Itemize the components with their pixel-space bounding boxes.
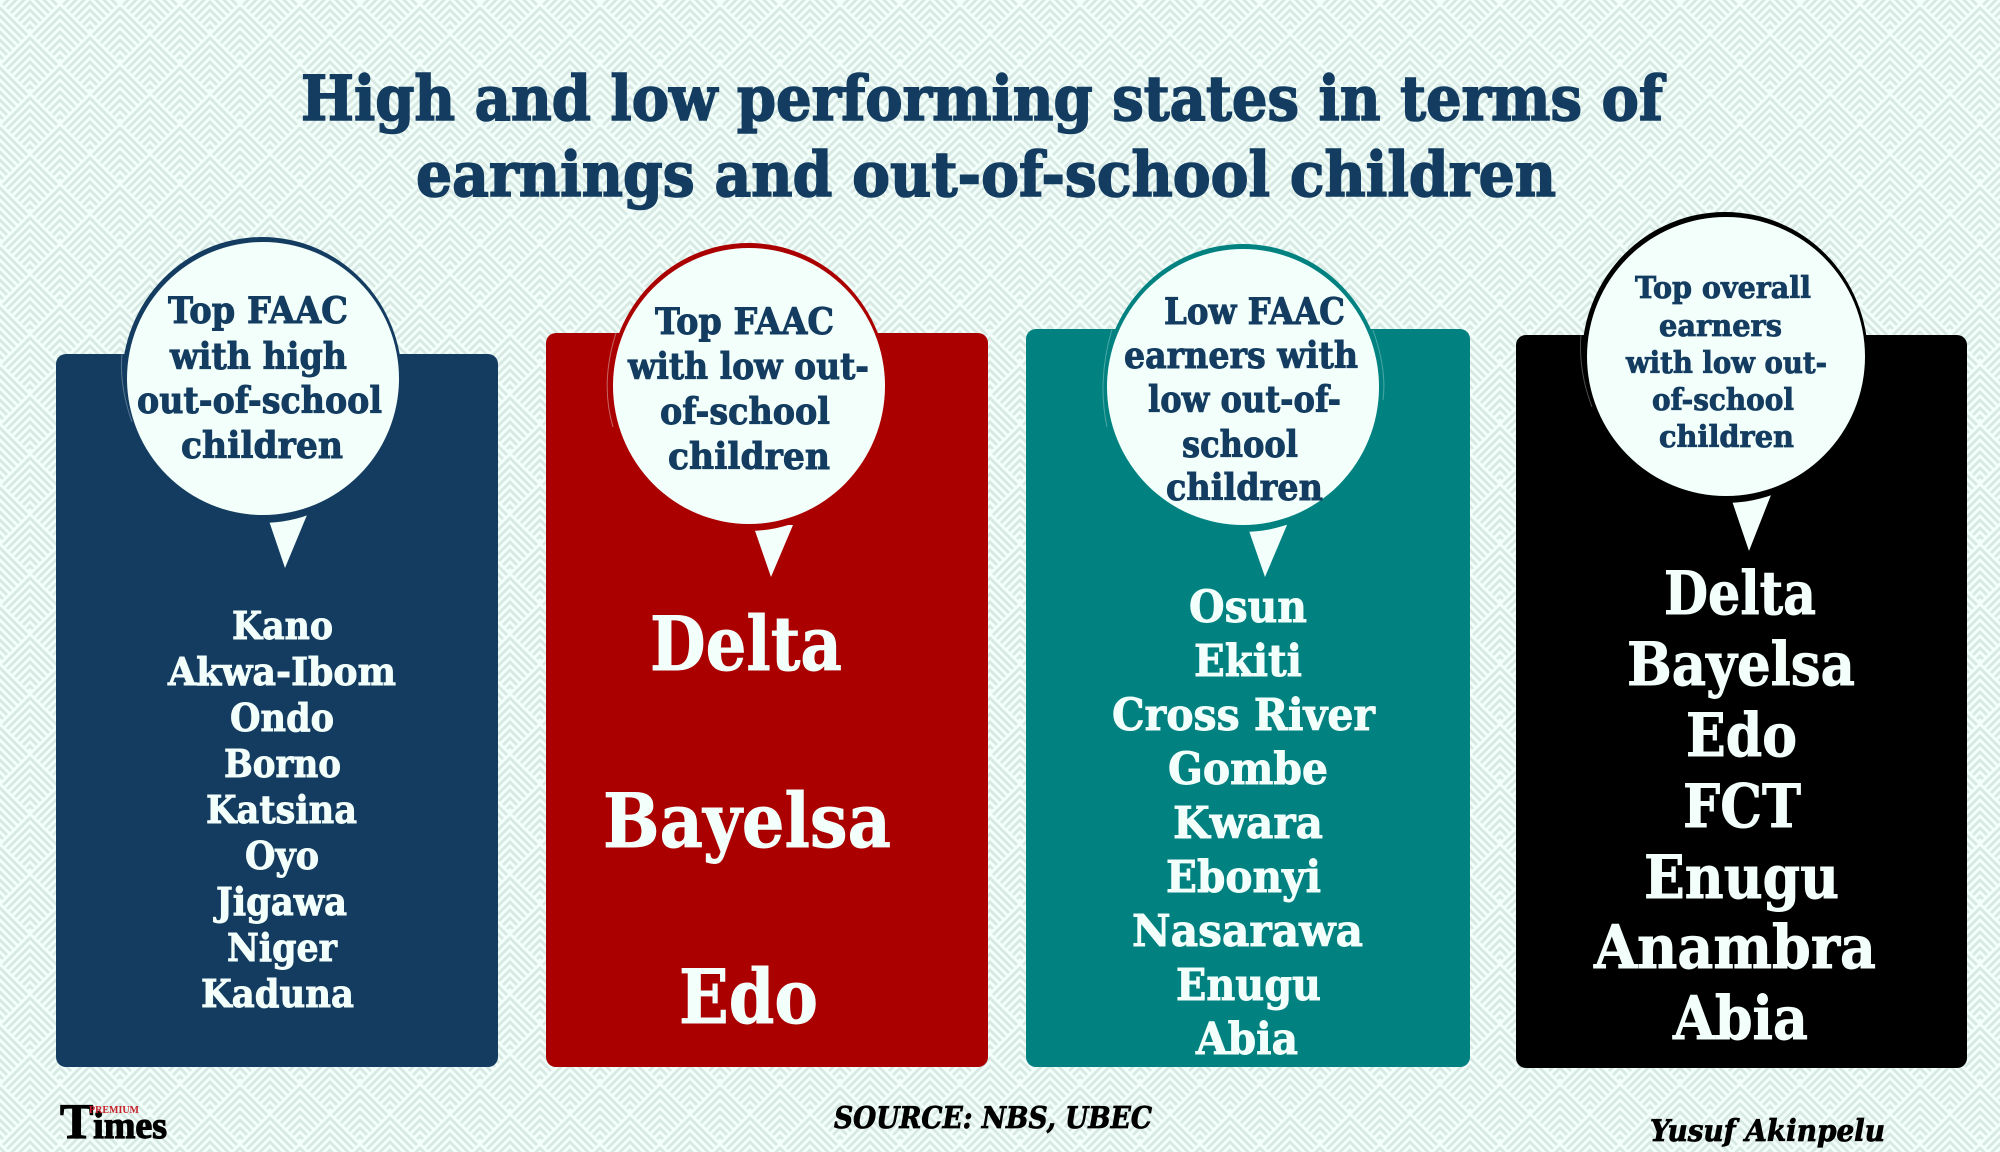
panel: top overall earners with low out-of-school children (1516, 212, 1967, 1068)
icon: speech bubble pointer, teal panel (1247, 525, 1287, 577)
bubble heading, black panel: with low out- (1625, 346, 1827, 381)
bubble ring, navy panel (122, 237, 402, 523)
icon: speech bubble pointer, navy panel (267, 515, 307, 568)
bubble heading, navy panel: children (181, 425, 343, 467)
bubble heading, black panel (1625, 271, 1827, 455)
bubble heading, teal panel: earners with (1124, 335, 1358, 377)
state list, red panel: Bayelsa (603, 777, 891, 865)
bubble fill, black panel (1587, 217, 1865, 496)
bubble heading, navy panel: with high (169, 336, 347, 378)
panel: top FAAC with high out-of-school children (56, 237, 498, 1067)
bubble heading, black panel: Top overall (1635, 271, 1811, 306)
bubble heading, teal panel (1124, 291, 1358, 509)
bubble heading, red panel: Top FAAC (655, 301, 834, 343)
bubble fill, teal panel (1107, 249, 1379, 525)
icon: speech bubble pointer, red panel (753, 525, 793, 577)
state list, navy panel: Jigawa (213, 879, 347, 924)
state list, navy panel: Borno (224, 741, 341, 786)
state list, navy panel: Katsina (206, 787, 357, 832)
bubble heading, red panel: children (668, 436, 830, 478)
panel: top FAAC with low out-of-school children (546, 243, 988, 1067)
bubble heading, teal panel: Low FAAC (1164, 291, 1345, 333)
bubble heading, teal panel: low out-of- (1148, 379, 1341, 421)
state list, black panel: FCT (1683, 772, 1801, 842)
bubble heading, teal panel: children (1166, 467, 1323, 509)
bubble heading, black panel: children (1659, 420, 1794, 455)
bubble heading, black panel: of-school (1652, 383, 1794, 418)
panel: low FAAC earners with low out-of-school children (1026, 244, 1470, 1067)
state list, navy panel: Akwa-Ibom (167, 649, 396, 694)
bubble ring, black panel (1582, 212, 1868, 503)
bubble fill, red panel (613, 248, 885, 524)
bubble heading, black panel: earners (1659, 309, 1782, 344)
state list, black panel: Delta (1664, 559, 1816, 629)
state list, navy panel: Ondo (230, 695, 334, 740)
icon: speech bubble pointer, black panel (1730, 495, 1771, 551)
bubble ring, red panel (609, 243, 888, 531)
state list, black panel: Anambra (1593, 913, 1876, 983)
state list, red panel: Edo (679, 953, 818, 1041)
state list, black panel (1593, 559, 1876, 1054)
bubble heading, navy panel: out-of-school (137, 380, 382, 422)
state list, navy panel: Niger (227, 925, 338, 970)
logo: Premium Times: PREMIUM (89, 1105, 140, 1116)
title: High and low performing states in terms of (301, 62, 1666, 135)
bubble heading, navy panel: Top FAAC (168, 290, 348, 332)
state list, navy panel: Kaduna (201, 971, 354, 1016)
title: earnings and out-of-school children (416, 138, 1556, 211)
state list, teal panel: Gombe (1168, 744, 1328, 795)
bubble heading, navy panel (137, 290, 382, 467)
bubble heading, red panel (627, 301, 869, 478)
state list, red panel (603, 600, 891, 1041)
state list, black panel: Abia (1672, 984, 1808, 1054)
bubble heading, red panel: with low out- (627, 346, 869, 388)
source note: SOURCE: NBS, UBEC (834, 1101, 1152, 1136)
state list, teal panel: Ebonyi (1166, 852, 1321, 903)
state list, teal panel: Cross River (1112, 690, 1376, 741)
state list, teal panel: Nasarawa (1132, 906, 1363, 957)
state list, red panel: Delta (650, 600, 842, 688)
bubble ring, teal panel (1103, 244, 1383, 532)
state list, navy panel: Oyo (245, 833, 319, 878)
state list, black panel: Enugu (1644, 843, 1839, 913)
state list, black panel: Bayelsa (1627, 630, 1855, 700)
state list, navy panel (167, 603, 396, 1016)
state list, teal panel: Abia (1195, 1014, 1298, 1065)
state list, teal panel (1112, 582, 1376, 1065)
bubble fill, navy panel (127, 242, 399, 515)
bubble heading, red panel: of-school (660, 391, 830, 433)
author credit: Yusuf Akinpelu (1650, 1114, 1885, 1149)
state list, black panel: Edo (1686, 701, 1797, 771)
state list, teal panel: Kwara (1173, 798, 1323, 849)
title (301, 62, 1666, 211)
logo: Premium Times: Times (60, 1093, 167, 1149)
state list, teal panel: Enugu (1176, 960, 1321, 1011)
state list, teal panel: Osun (1189, 582, 1307, 633)
state list, navy panel: Kano (232, 603, 333, 648)
state list, teal panel: Ekiti (1194, 636, 1302, 687)
bubble heading, teal panel: school (1182, 424, 1298, 466)
